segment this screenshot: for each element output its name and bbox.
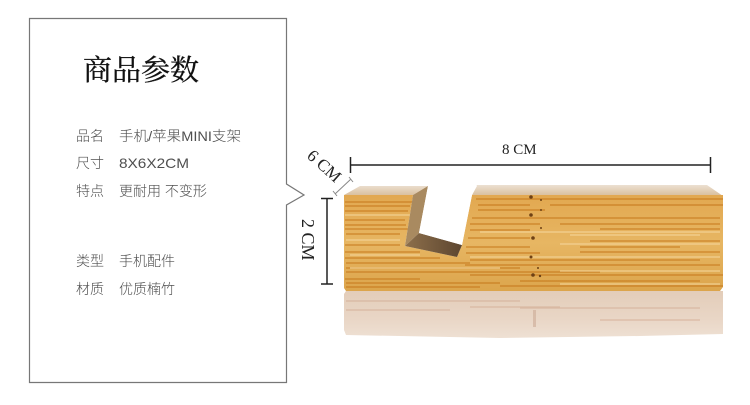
top face [344, 185, 723, 196]
spec row: name: 手机/苹果MINI支架 [119, 128, 241, 144]
front face [344, 195, 723, 291]
spec row: features [76, 183, 207, 199]
spec row: material: 优质楠竹 [119, 281, 175, 297]
panel: product parameters [30, 18, 304, 382]
spec row: size: 8X6X2CM [119, 155, 189, 171]
dimension: 6 CM [303, 146, 353, 196]
spec row: material [76, 281, 175, 297]
spec row: type [76, 253, 175, 269]
spec row: material: 材质 [76, 281, 104, 297]
dimension: 8 CM: 8 CM [502, 142, 537, 158]
panel outline with notch [30, 18, 304, 382]
bamboo node [529, 195, 542, 277]
spec row: type: 手机配件 [119, 253, 175, 269]
spec row: type: 类型 [76, 253, 104, 269]
dimension: 8 CM [350, 142, 710, 173]
dimension: 6 CM: 6 CM [303, 146, 345, 186]
reflection [344, 291, 723, 338]
dimension: 2 CM: 2 CM [298, 219, 318, 261]
bamboo grain [345, 199, 723, 287]
spec row: features: 特点 [76, 183, 104, 199]
spec row: size [76, 155, 189, 171]
bamboo phone stand photo [344, 185, 723, 338]
heading: 商品参数 [83, 54, 199, 87]
spec row: features: 更耐用 不变形 [119, 183, 207, 199]
slot inner faces [405, 186, 428, 246]
spec row: name: 品名 [76, 128, 104, 144]
dimension: 2 CM [298, 198, 333, 284]
spec row: size: 尺寸 [76, 155, 104, 171]
